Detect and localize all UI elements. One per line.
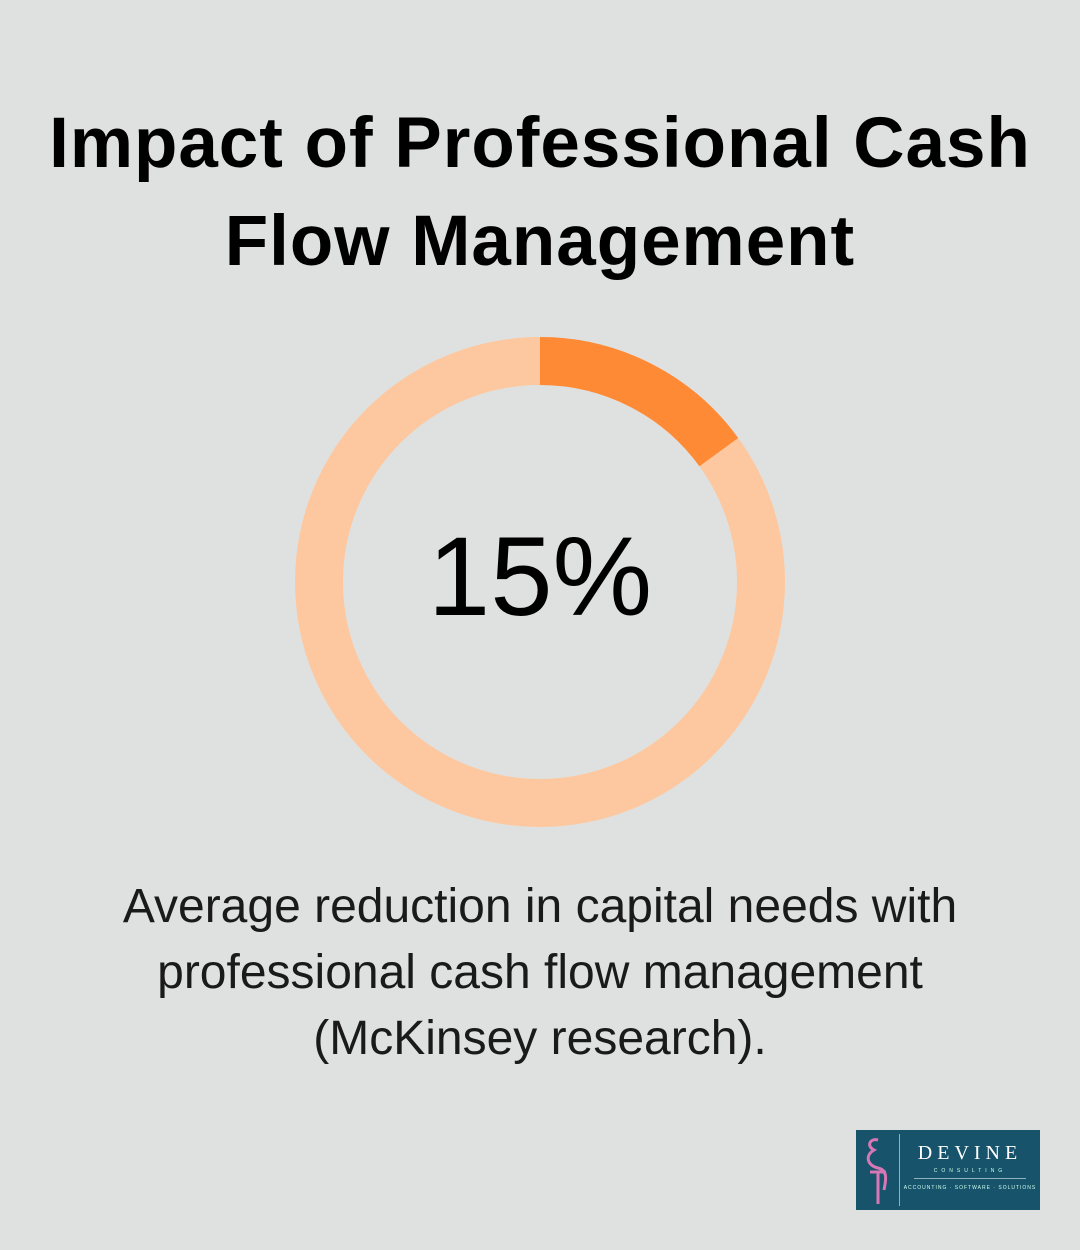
- description: [123, 880, 957, 1065]
- logo: Devine Consulting: [856, 1130, 1040, 1210]
- description: (McKinsey research).: [313, 1012, 767, 1065]
- description: Average reduction in capital needs with: [123, 880, 957, 933]
- percentage value: 15%: [428, 514, 652, 639]
- logo: Devine Consulting: CONSULTING: [934, 1168, 1006, 1174]
- title: Impact of Professional Cash: [49, 104, 1031, 183]
- icon: flamingo: [866, 1138, 888, 1204]
- title: [49, 104, 1031, 281]
- title: Flow Management: [225, 202, 855, 281]
- description: professional cash flow management: [157, 946, 923, 999]
- logo: Devine Consulting: DEVINE: [918, 1142, 1022, 1164]
- logo: Devine Consulting: ACCOUNTING · SOFTWARE · SOLUTIONS: [904, 1185, 1036, 1191]
